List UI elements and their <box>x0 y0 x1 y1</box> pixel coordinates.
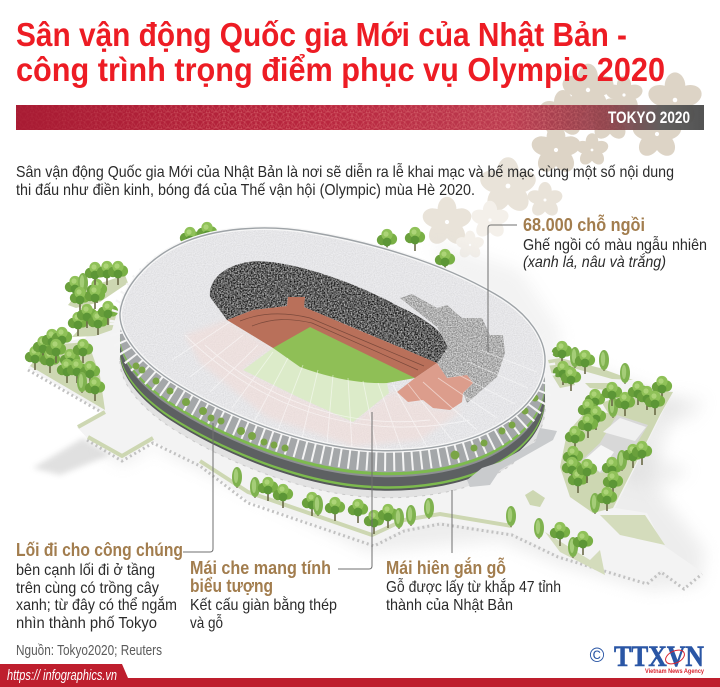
stadium terrace planting <box>132 362 538 460</box>
decorative sakura flowers <box>420 64 704 260</box>
roof truss lines <box>172 322 537 450</box>
seating: dark stands <box>210 261 448 363</box>
source note: Nguồn: Tokyo2020; Reuters <box>16 642 162 659</box>
seating: stands seen through the roof <box>400 294 505 403</box>
callout: wooden eaves <box>386 557 561 614</box>
callout: public walkway: xanh; từ đây có thể ngắm <box>16 595 177 614</box>
intro paragraph: thi đấu như điền kinh, bóng đá của Thế vận hội (Olympic) mùa Hè 2020. <box>16 182 475 199</box>
header band: Tokyo 2020: TOKYO 2020 <box>608 108 690 127</box>
footer band with URL tab: https:// infographics.vn <box>7 667 117 684</box>
track seen through the roof <box>397 363 473 410</box>
title: công trình trọng điểm phục vụ Olympic 2020 <box>16 51 665 88</box>
callout: 68.000 seats: (xanh lá, nâu và trắng) <box>523 252 666 271</box>
illustration: plaza building on the right <box>582 415 648 473</box>
callout: wooden eaves: thành của Nhật Bản <box>386 597 513 614</box>
callout: public walkway: bên cạnh lối đi ở tầng <box>16 562 155 579</box>
illustration: stadium <box>120 228 557 498</box>
illustration: grounds around the stadium <box>28 240 705 590</box>
intro paragraph <box>16 162 674 199</box>
callout: wooden eaves: Mái hiên gắn gỗ <box>386 557 506 578</box>
stadium roof <box>120 228 545 451</box>
illustration: trees <box>25 222 672 558</box>
callout: 68.000 seats <box>523 214 707 271</box>
callout: public walkway: nhìn thành phố Tokyo <box>16 615 157 632</box>
running track <box>227 297 437 378</box>
logo: TTXVN: Vietnam News Agency <box>645 668 704 675</box>
callout: public walkway <box>16 539 183 632</box>
stadium lower tiers with green terraces <box>120 238 545 498</box>
callout: public walkway: Lối đi cho công chúng <box>16 539 183 560</box>
callout: wooden eaves: Gỗ được lấy từ khắp 47 tỉnh <box>386 577 561 596</box>
callout: iconic roof: Mái che mang tính <box>190 557 331 578</box>
leader lines <box>183 225 517 569</box>
callout: public walkway: trên cùng có trồng cây <box>16 580 159 597</box>
translucent roof: pale green pitch <box>243 348 389 422</box>
callout: iconic roof <box>190 557 337 632</box>
logo: TTXVN: © <box>590 645 605 667</box>
callout: iconic roof: Kết cấu giàn bằng thép <box>190 595 337 614</box>
callout: 68.000 seats: 68.000 chỗ ngồi <box>523 214 645 235</box>
callout: iconic roof: và gỗ <box>190 613 223 632</box>
title <box>16 16 665 88</box>
footer band with URL tab <box>0 664 720 687</box>
translucent roof: pink track glow <box>185 320 462 446</box>
logo: TTXVN <box>590 640 704 675</box>
foreground trees <box>232 467 434 534</box>
football pitch <box>273 327 415 383</box>
title: Sân vận động Quốc gia Mới của Nhật Bản - <box>16 16 627 53</box>
header band: Tokyo 2020 <box>16 105 704 130</box>
logo: TTXVN: TTXVN <box>614 640 704 673</box>
canopy on the right side <box>467 428 557 487</box>
callout: iconic roof: biểu tượng <box>190 575 273 596</box>
